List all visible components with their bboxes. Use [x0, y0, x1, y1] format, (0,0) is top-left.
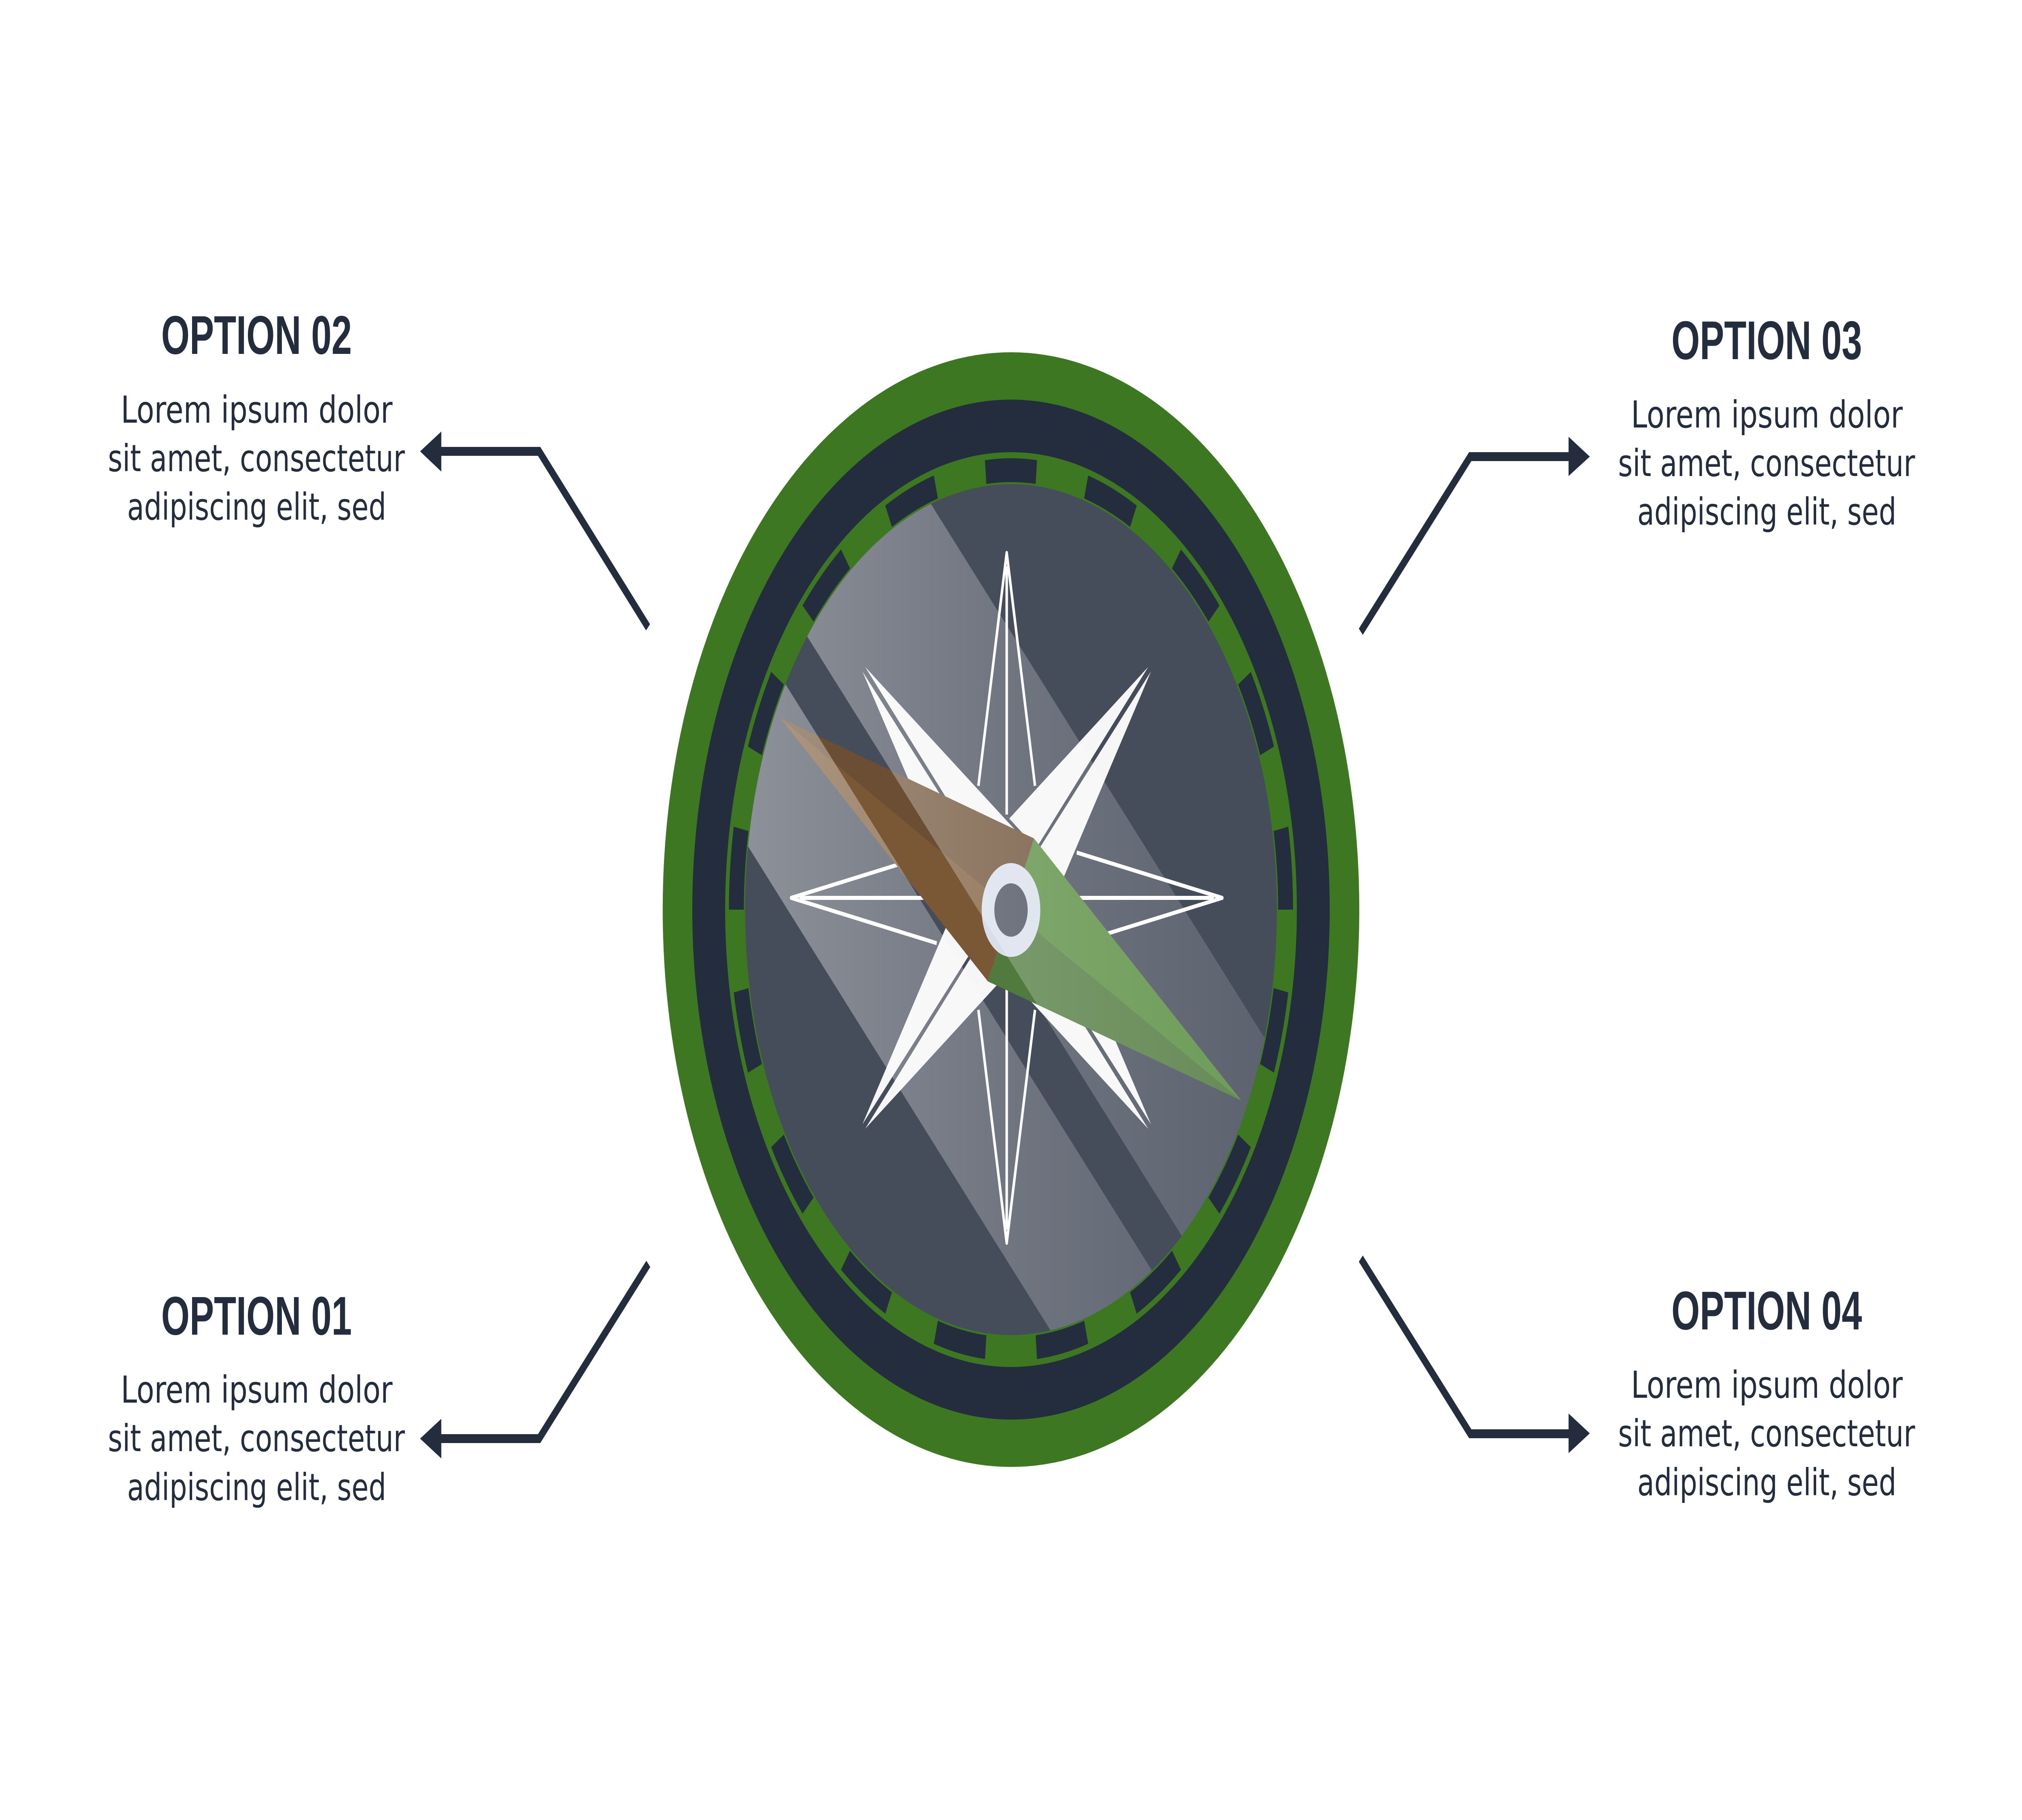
glass light reflection bands: [748, 504, 1265, 1331]
infographic canvas: [109, 315, 1915, 1508]
body: option 01: [108, 1369, 405, 1509]
heading: option 02: OPTION 02: [161, 305, 352, 366]
arrow: option 04: [1361, 1259, 1590, 1453]
body: option 04: Lorem ipsum dolor: [1631, 1364, 1903, 1407]
body: option 04: [1618, 1364, 1915, 1505]
body: option 03: Lorem ipsum dolor: [1631, 394, 1903, 437]
body: option 03: sit amet, consectetur: [1618, 442, 1915, 485]
heading: option 04: OPTION 04: [1671, 1280, 1862, 1341]
arrow: option 02: [420, 432, 648, 627]
body: option 02: Lorem ipsum dolor: [121, 389, 393, 432]
body: option 01: Lorem ipsum dolor: [121, 1369, 393, 1412]
body: option 04: adipiscing elit, sed: [1637, 1461, 1896, 1505]
body: option 02: adipiscing elit, sed: [127, 486, 386, 529]
body: option 02: [108, 389, 405, 529]
text block: option 02: [108, 305, 405, 529]
compass navy ring: [692, 400, 1330, 1420]
bezel tick marks: [728, 458, 1294, 1361]
body: option 03: adipiscing elit, sed: [1637, 491, 1896, 534]
compass needle: [780, 718, 1241, 1100]
compass glass face: [745, 484, 1277, 1335]
rose diagonal filled points: [862, 667, 1151, 1129]
heading: option 01: OPTION 01: [161, 1285, 352, 1346]
body: option 04: sit amet, consectetur: [1618, 1412, 1915, 1456]
rose outline points: [791, 553, 1222, 1243]
compass rose star: [791, 553, 1222, 1243]
text block: option 01: [108, 1285, 405, 1509]
text block: option 04: [1618, 1280, 1915, 1505]
compass: [662, 352, 1360, 1467]
body: option 03: [1618, 394, 1915, 534]
arrow: option 01: [420, 1264, 648, 1458]
body: option 02: sit amet, consectetur: [108, 437, 405, 480]
arrow: option 03: [1361, 437, 1590, 632]
heading: option 03: OPTION 03: [1671, 310, 1862, 371]
needle pivot ring: [982, 863, 1040, 957]
body: option 01: sit amet, consectetur: [108, 1417, 405, 1460]
body: option 01: adipiscing elit, sed: [127, 1466, 386, 1509]
compass outer green rim: [663, 352, 1359, 1467]
compass inner green ring: [725, 452, 1297, 1367]
text block: option 03: [1618, 310, 1915, 534]
